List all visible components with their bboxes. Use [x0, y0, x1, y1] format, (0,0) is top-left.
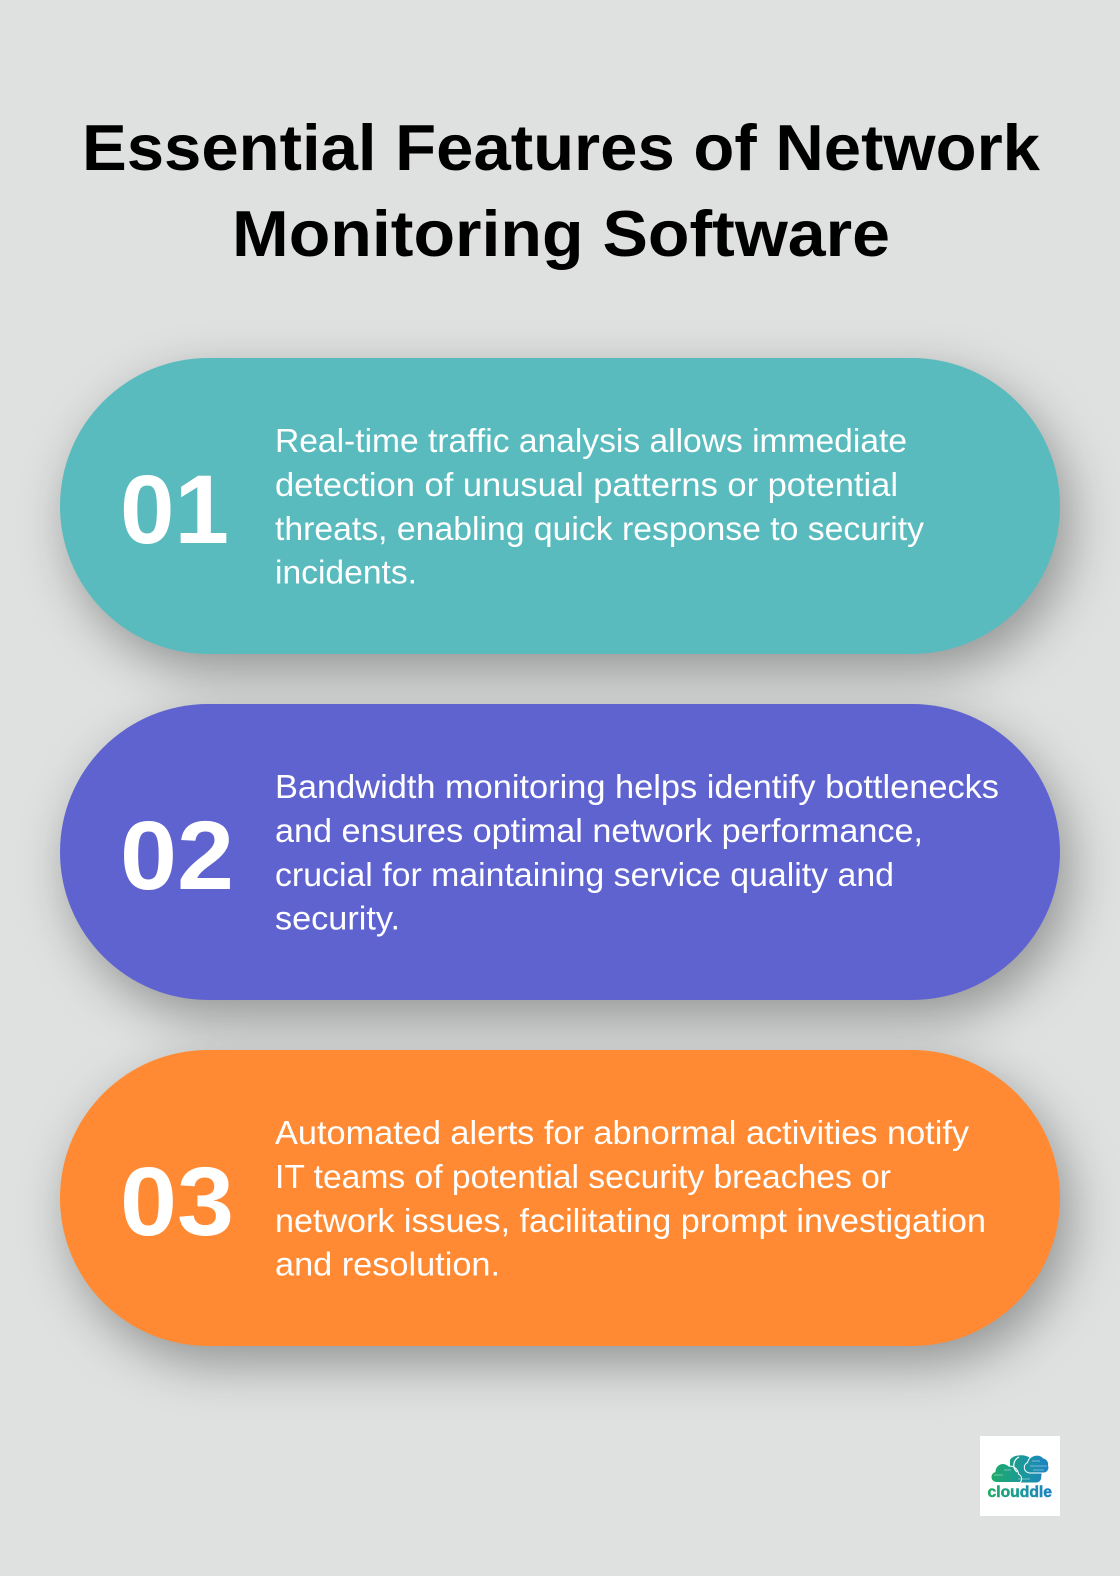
text block: feature 02 description [275, 768, 999, 936]
text block: feature 02 description: Bandwidth monitoring helps identify bottlenecks [275, 768, 999, 805]
number 01: 01 [120, 455, 229, 564]
icon: clouddle logo: clouddle [988, 1484, 1052, 1501]
text block: feature 03 description: Automated alerts for abnormal activities notify [275, 1114, 970, 1151]
text block: feature 02 description: crucial for maintaining service quality and [275, 856, 894, 893]
panel: feature 03 automated alerts [60, 1050, 1060, 1346]
number 02: 02 [120, 801, 234, 910]
text block: feature 01 description: Real-time traffic analysis allows immediate [275, 422, 907, 459]
number 03: 03 [120, 1147, 234, 1256]
title: Monitoring Software [232, 197, 890, 270]
panel: feature 02 bandwidth monitoring [60, 704, 1060, 1000]
text block: feature 01 description: incidents. [275, 554, 417, 590]
text block: feature 03 description: IT teams of potential security breaches or [275, 1158, 891, 1195]
title [82, 111, 1041, 270]
text block: feature 03 description: and resolution. [275, 1246, 500, 1282]
title: Essential Features of Network [82, 111, 1041, 184]
panel: feature 01 real-time traffic analysis [60, 358, 1060, 654]
text block: feature 03 description [275, 1114, 986, 1282]
text block: feature 01 description: detection of unusual patterns or potential [275, 466, 898, 503]
icon: clouddle logo [980, 1436, 1060, 1516]
text block: feature 02 description: security. [275, 900, 400, 936]
text block: feature 02 description: and ensures optimal network performance, [275, 812, 923, 849]
text block: feature 01 description: threats, enabling quick response to security [275, 510, 925, 547]
text block: feature 03 description: network issues, facilitating prompt investigation [275, 1202, 986, 1239]
text block: feature 01 description [275, 422, 925, 590]
